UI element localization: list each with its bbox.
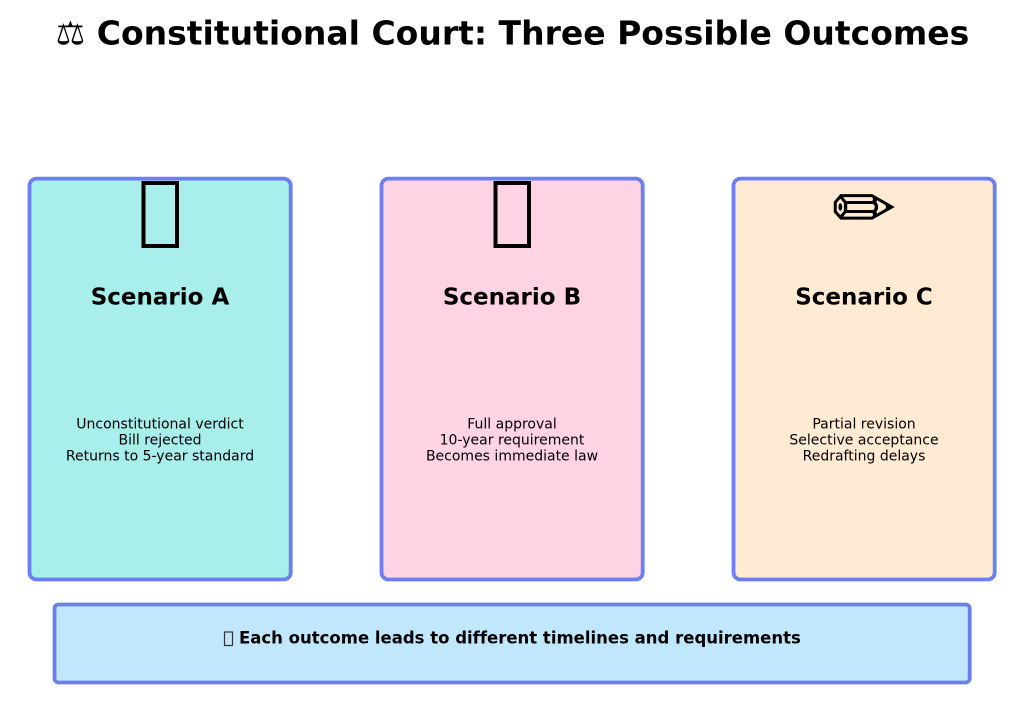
heading: scenario B: Scenario B: [443, 284, 581, 310]
text: scenario C details: Redrafting delays: [803, 448, 925, 464]
panel: scenario C: [734, 165, 995, 580]
icon: pencil: ✏: [832, 165, 896, 254]
text: scenario B details: 10-year requirement: [440, 432, 585, 448]
text: scenario A details: [66, 416, 254, 464]
text: scenario A details: Bill rejected: [119, 432, 201, 448]
text: scenario C details: [789, 416, 939, 464]
text: scenario A details: Unconstitutional verdict: [76, 416, 244, 432]
panel: scenario A: [30, 179, 291, 580]
panel: summary banner: [54, 604, 970, 682]
heading: scenario A: Scenario A: [91, 284, 229, 310]
text: scenario C details: Selective acceptance: [789, 432, 939, 448]
text: scenario B details: [426, 416, 598, 464]
icon: scenario A missing glyph: [144, 183, 177, 246]
text: scenario B details: Becomes immediate law: [426, 448, 598, 464]
text: banner message: Each outcome leads to different timelines and requirements: [239, 628, 801, 648]
panel: scenario B: [382, 179, 643, 580]
title: ⚖ Constitutional Court: Three Possible Outcomes: [56, 14, 969, 52]
text: scenario A details: Returns to 5-year standard: [66, 448, 254, 464]
icon: banner missing glyph: [224, 632, 232, 646]
text: scenario B details: Full approval: [467, 416, 557, 432]
icon: scenario B missing glyph: [496, 183, 529, 246]
text: scenario C details: Partial revision: [812, 416, 916, 432]
heading: scenario C: Scenario C: [795, 284, 933, 310]
